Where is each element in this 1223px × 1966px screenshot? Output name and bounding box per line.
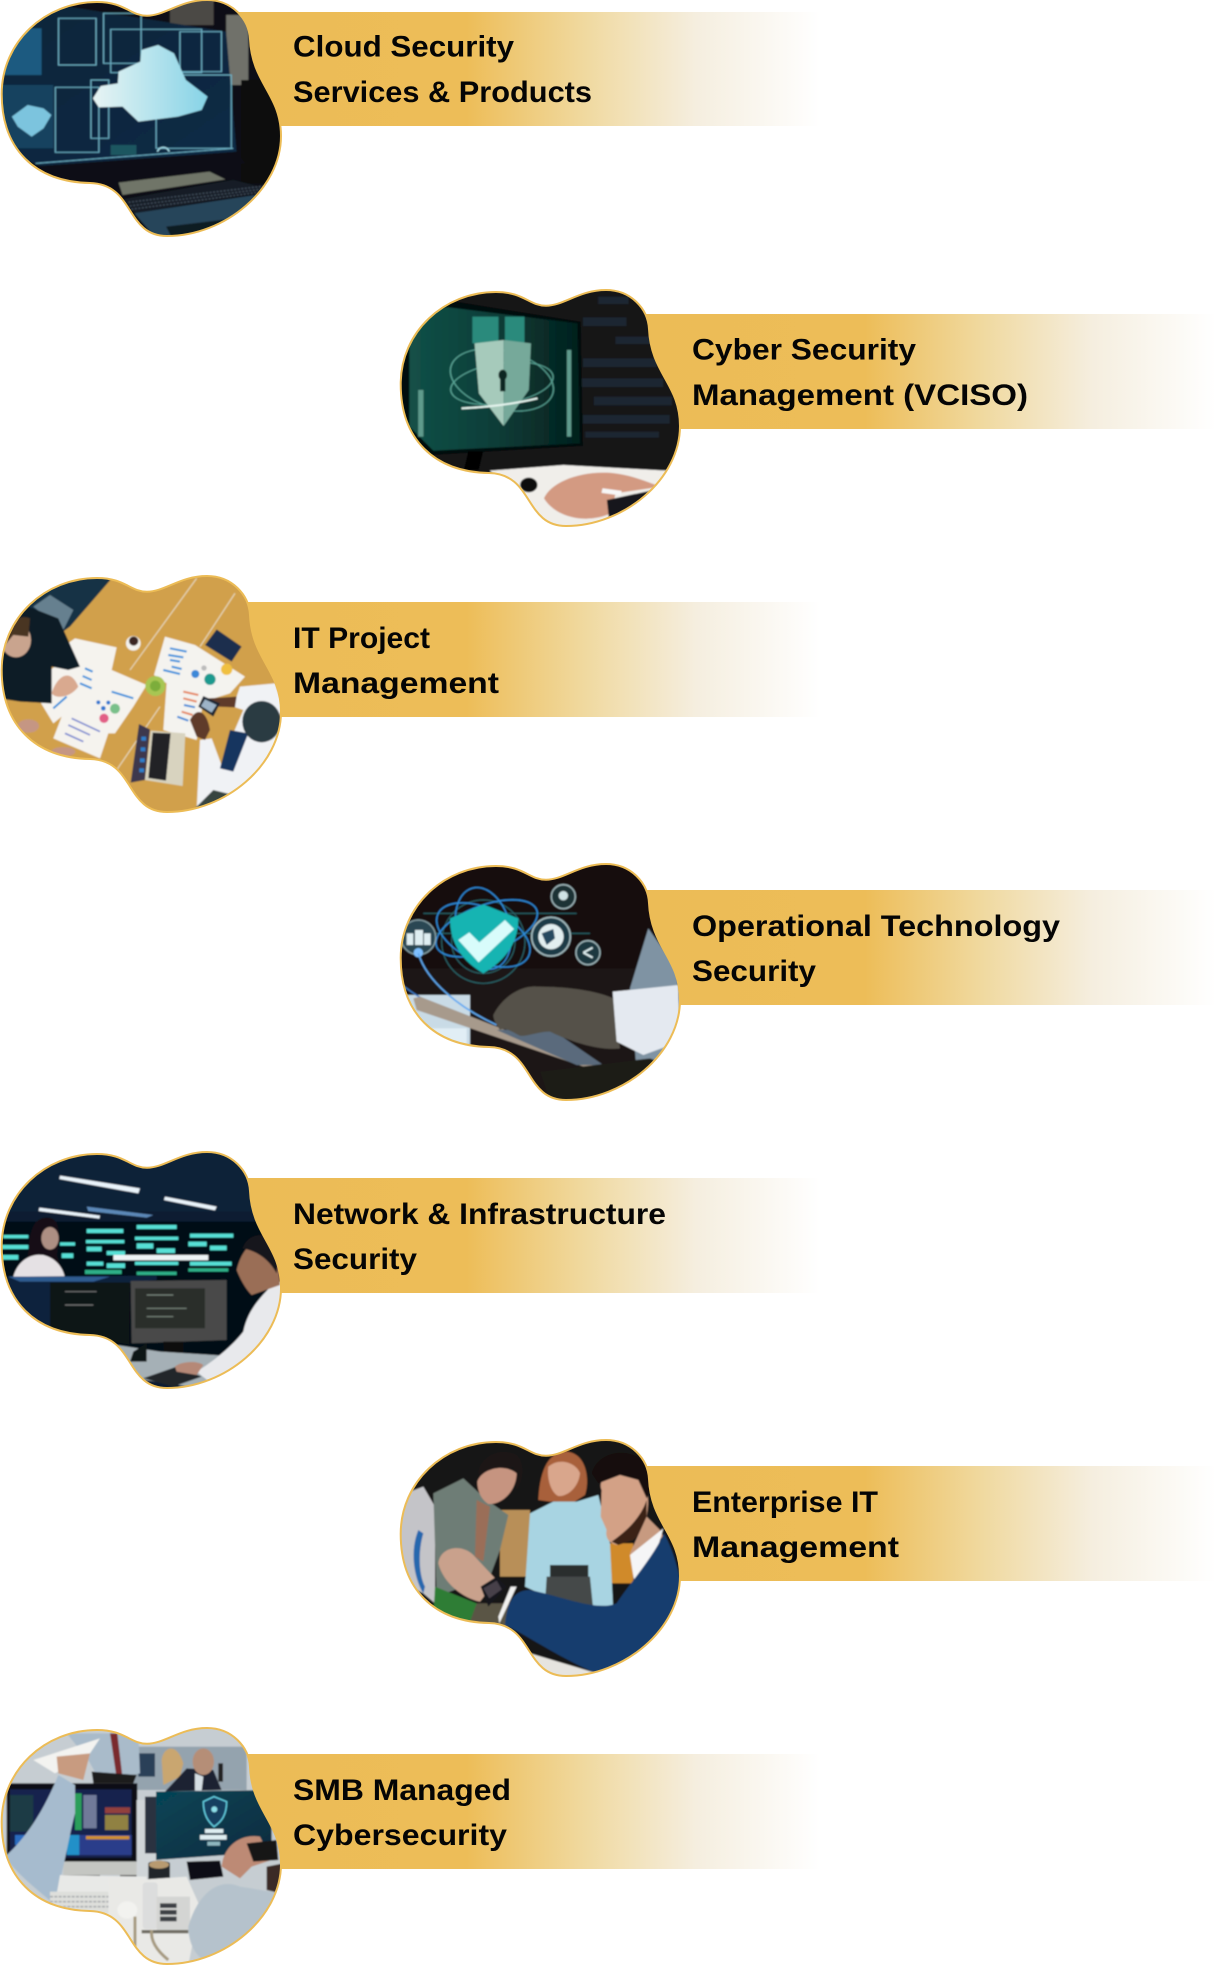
photo: meeting table with charts: [0, 570, 287, 823]
panel: Enterprise IT Management: [400, 1439, 1184, 1677]
blob outline: [401, 864, 680, 1100]
blob outline: [401, 290, 680, 526]
heading: Enterprise IT: [692, 1486, 878, 1519]
heading: [293, 622, 499, 700]
panel: SMB Managed Cybersecurity: [0, 1720, 820, 1966]
blob outline: [2, 0, 281, 236]
panel: Cloud Security Services & Products: [0, 0, 820, 250]
heading: [692, 334, 1028, 412]
photo: busy office with security monitors: [0, 1720, 287, 1966]
panel: IT Project Management: [0, 570, 820, 823]
heading: [692, 1486, 899, 1564]
heading: Management (VCISO): [692, 379, 1028, 412]
heading: [692, 910, 1060, 988]
photo: three colleagues at a screen: [400, 1439, 681, 1677]
heading: Management: [692, 1531, 899, 1564]
blob outline: [2, 1728, 281, 1964]
photo: hand on tablet with security icons: [400, 863, 681, 1101]
gold band: [200, 1178, 820, 1293]
heading: IT Project: [293, 622, 430, 655]
gold band: [600, 1466, 1216, 1581]
panel: Operational Technology Security: [400, 863, 1184, 1101]
gold band: [200, 1754, 820, 1869]
heading: Cloud Security: [293, 30, 514, 64]
photo: monitor with glowing cloud: [0, 0, 282, 237]
heading: Cyber Security: [692, 334, 916, 366]
panel: Network & Infrastructure Security: [0, 1145, 820, 1398]
heading: Operational Technology: [692, 910, 1060, 943]
blob outline: [401, 1440, 680, 1676]
heading: [293, 30, 592, 109]
heading: [293, 1774, 511, 1852]
gold band: [200, 602, 820, 717]
heading: Cybersecurity: [293, 1819, 507, 1852]
heading: SMB Managed: [293, 1774, 511, 1807]
heading: Services & Products: [293, 76, 592, 109]
heading: Security: [293, 1243, 417, 1276]
heading: Security: [692, 955, 816, 988]
gold band: [600, 314, 1216, 429]
gold band: [200, 12, 820, 126]
heading: Network & Infrastructure: [293, 1198, 666, 1231]
blob outline: [2, 576, 281, 812]
photo: shield on monitor and typing hands: [400, 289, 681, 527]
photo: data center operators: [0, 1145, 287, 1398]
panel: Cyber Security Management (VCISO): [400, 289, 1184, 527]
blob outline: [2, 1152, 281, 1388]
heading: [293, 1198, 666, 1276]
heading: Management: [293, 667, 499, 700]
gold band: [600, 890, 1216, 1005]
